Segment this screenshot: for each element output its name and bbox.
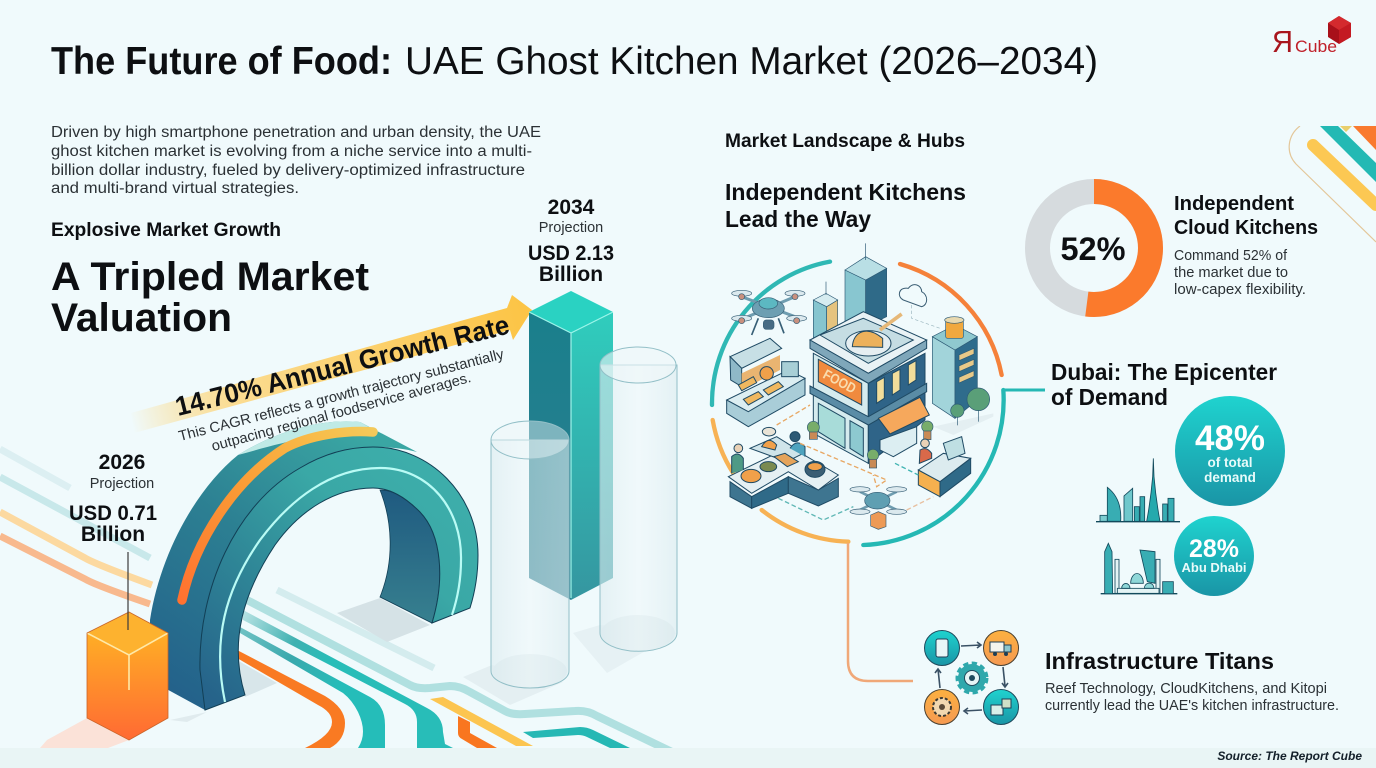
arch top highlight [238, 421, 378, 455]
top drone [732, 290, 807, 335]
CAGR note: outpacing regional foodservice averages. [210, 370, 473, 455]
arch front face [200, 447, 478, 710]
intro paragraph: billion dollar industry, fueled by delivery-optimized infrastructure [51, 162, 525, 179]
growth rate label: 14.70% Annual Growth Rate [172, 310, 512, 422]
icon: Abu Dhabi skyline [1101, 543, 1177, 594]
node: network [924, 690, 960, 724]
label: 2034 projection [528, 196, 614, 286]
right office tower [932, 317, 993, 435]
illustration: ghost kitchen hub [712, 243, 1004, 545]
FOOD sign: FOOD [821, 366, 859, 396]
title [51, 40, 1098, 83]
arch orange stripe [182, 432, 373, 600]
label: 2026 projection [69, 451, 157, 546]
stat: 48 percent of total demand: 48% [1195, 419, 1265, 458]
text: infrastructure titans [1045, 648, 1339, 714]
heading: Dubai the epicenter of demand: of Demand [1051, 384, 1168, 410]
heading: explosive market growth: Explosive Market Growth [51, 219, 281, 241]
intro paragraph: Driven by high smartphone penetration and urban density, the UAE [51, 124, 541, 141]
arch glowing line [220, 468, 461, 702]
arch inner dark face [380, 490, 440, 623]
flowing background data streams [0, 449, 672, 752]
title: The Future of Food: [51, 40, 392, 83]
intro paragraph: and multi-brand virtual strategies. [51, 180, 299, 197]
decoration: top-right stripes [1289, 126, 1376, 242]
planters [807, 421, 933, 468]
label: 2026 projection: Projection [90, 476, 154, 492]
text: independent cloud kitchens: Command 52% of [1174, 248, 1288, 264]
label: 2034 projection: Billion [539, 263, 603, 286]
label: 2034 projection: 2034 [548, 196, 595, 219]
intro paragraph [51, 124, 541, 197]
right service counter [918, 437, 971, 497]
logo: RCube: Cube [1295, 37, 1337, 56]
heading: Dubai the epicenter of demand: Dubai: The Epicenter [1051, 359, 1277, 385]
chart: growth arch from 2026 to 2034 [150, 421, 478, 710]
ground shadows [40, 598, 677, 748]
logo: RCube: Я [1272, 24, 1293, 59]
back towers [813, 243, 887, 340]
heading: a tripled market valuation [51, 255, 369, 340]
donut value: 52% [1060, 231, 1126, 267]
ring arcs [712, 262, 1004, 545]
heading: market landscape and hubs: Market Landscape & Hubs [725, 130, 965, 152]
connector: hub to infrastructure [848, 543, 913, 681]
heading: Dubai the epicenter of demand [1051, 359, 1277, 410]
cloud [899, 285, 927, 307]
dashed network paths [777, 405, 933, 520]
logo: RCube [1272, 16, 1351, 59]
label: 2034 projection: Projection [539, 220, 603, 236]
center gear [958, 664, 986, 692]
text: infrastructure titans: Reef Technology, CloudKitchens, and Kitopi [1045, 681, 1327, 697]
arch outer band [150, 421, 417, 710]
node: delivery [984, 630, 1018, 666]
icon: infrastructure cycle [924, 630, 1018, 724]
heading: independent kitchens lead the way: Independent Kitchens [725, 179, 966, 205]
glass cylinders [491, 347, 677, 688]
lower kitchen island [728, 427, 838, 508]
heading: a tripled market valuation: A Tripled Market [51, 255, 369, 299]
stat: 48 percent of total demand: demand [1204, 470, 1256, 485]
intro paragraph: ghost kitchen market is evolving from a niche service into a multi- [51, 143, 532, 160]
source note: Source: The Report Cube [1217, 749, 1362, 763]
arrow: annual growth rate [131, 295, 532, 455]
node: app [924, 630, 960, 666]
icon: Dubai skyline [1096, 458, 1180, 522]
cycle arrows [935, 642, 1008, 714]
label: 2026 projection: USD 0.71 [69, 502, 157, 525]
stat: 28 percent Abu Dhabi: Abu Dhabi [1182, 561, 1246, 575]
stat: 48 percent of total demand: of total [1208, 455, 1252, 470]
text: infrastructure titans: currently lead the UAE's kitchen infrastructure. [1045, 698, 1339, 714]
chart: donut 52 percent [1038, 192, 1150, 304]
connector: hub to Dubai [1003, 388, 1045, 392]
label: 2026 projection: Billion [81, 523, 145, 546]
CAGR note: This CAGR reflects a growth trajectory substantially [177, 346, 506, 445]
label: 2034 projection: USD 2.13 [528, 242, 614, 265]
footer band [0, 748, 1376, 768]
text: infrastructure titans: Infrastructure Titans [1045, 648, 1274, 674]
heading: independent kitchens lead the way: Lead the Way [725, 206, 871, 232]
bar: 2026 orange cube [87, 612, 168, 740]
stat: 28 percent Abu Dhabi: 28% [1189, 535, 1239, 563]
text: independent cloud kitchens: Independent [1174, 192, 1294, 215]
bar: 2034 teal column [529, 291, 613, 600]
2026 leader line [127, 552, 129, 630]
label: 2026 projection: 2026 [99, 451, 145, 474]
left kitchen station [727, 338, 805, 427]
stat: 28 percent Abu Dhabi [1174, 516, 1254, 596]
heading: independent kitchens lead the way [725, 179, 966, 232]
text: independent cloud kitchens: low-capex flexibility. [1174, 282, 1306, 298]
title: UAE Ghost Kitchen Market (2026–2034) [405, 40, 1098, 83]
bottom delivery drone [850, 487, 907, 529]
node: packages [984, 690, 1018, 724]
central food building [810, 312, 929, 463]
text: independent cloud kitchens: Cloud Kitchens [1174, 216, 1318, 239]
text: independent cloud kitchens [1174, 192, 1318, 298]
stat: 48 percent of total demand [1175, 396, 1285, 506]
text: independent cloud kitchens: the market due to [1174, 265, 1288, 281]
heading: a tripled market valuation: Valuation [51, 296, 232, 340]
